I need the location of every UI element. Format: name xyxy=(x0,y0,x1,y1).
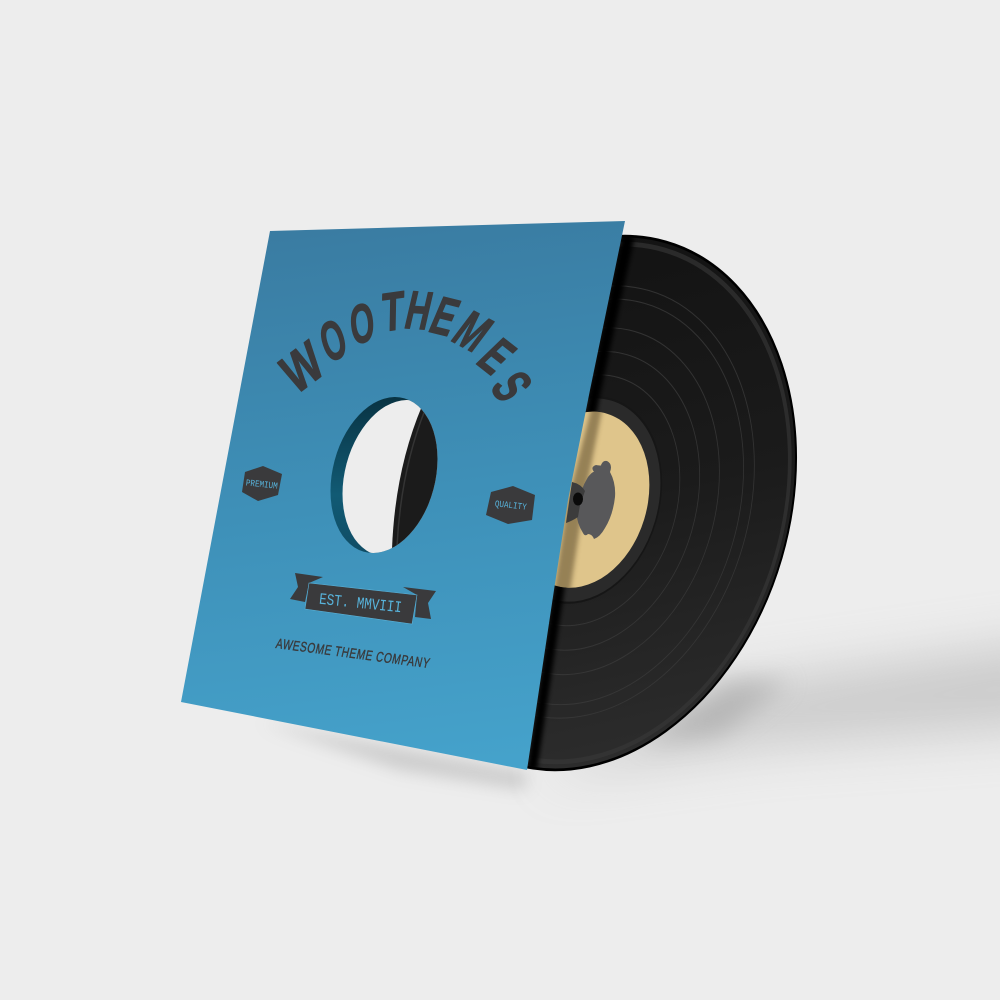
title: WOOTHEMES: E xyxy=(466,328,528,385)
title: WOOTHEMES: M xyxy=(442,300,503,363)
label logo shadow xyxy=(577,461,615,539)
spindle hole xyxy=(573,492,583,506)
sleeve face xyxy=(181,221,625,770)
title: WOOTHEMES: E xyxy=(422,285,468,348)
tagline: AWESOME THEME COMPANY xyxy=(274,636,432,671)
badge: quality: QUALITY xyxy=(494,499,527,513)
mockup scene xyxy=(181,221,1000,794)
ribbon text: EST. MMVIII xyxy=(318,591,403,618)
spindle shadow xyxy=(566,482,585,523)
sleeve xyxy=(181,221,625,770)
sleeve hole xyxy=(330,397,438,553)
hole inner edge xyxy=(330,397,438,553)
title: WOOTHEMES xyxy=(272,279,545,410)
title: WOOTHEMES: O xyxy=(347,292,377,357)
ribbon body xyxy=(305,583,417,624)
ribbon right tail xyxy=(403,587,436,619)
title: WOOTHEMES: T xyxy=(381,279,405,344)
grooves xyxy=(421,253,754,751)
badge: premium: PREMIUM xyxy=(245,478,278,492)
record outer sheen xyxy=(390,204,790,802)
record disc xyxy=(384,195,796,811)
badge: premium xyxy=(242,466,282,501)
title: WOOTHEMES: H xyxy=(400,280,438,341)
ribbon banner xyxy=(290,573,436,624)
dead wax ring xyxy=(503,381,661,619)
label edge shade xyxy=(554,412,604,588)
vinyl seen through hole xyxy=(392,408,438,548)
floor shadow of record xyxy=(540,640,1000,775)
sleeve floor shadow xyxy=(260,722,527,790)
title: WOOTHEMES: S xyxy=(478,362,545,410)
see-through background xyxy=(342,400,438,553)
vinyl rim highlight xyxy=(397,410,425,546)
badge: quality xyxy=(486,486,535,524)
sleeve edge shadow on record xyxy=(527,221,634,770)
vinyl record xyxy=(527,234,798,772)
title: WOOTHEMES: O xyxy=(313,307,354,375)
title: WOOTHEMES: W xyxy=(272,330,333,407)
ribbon left tail xyxy=(290,573,323,602)
record label xyxy=(513,398,649,601)
